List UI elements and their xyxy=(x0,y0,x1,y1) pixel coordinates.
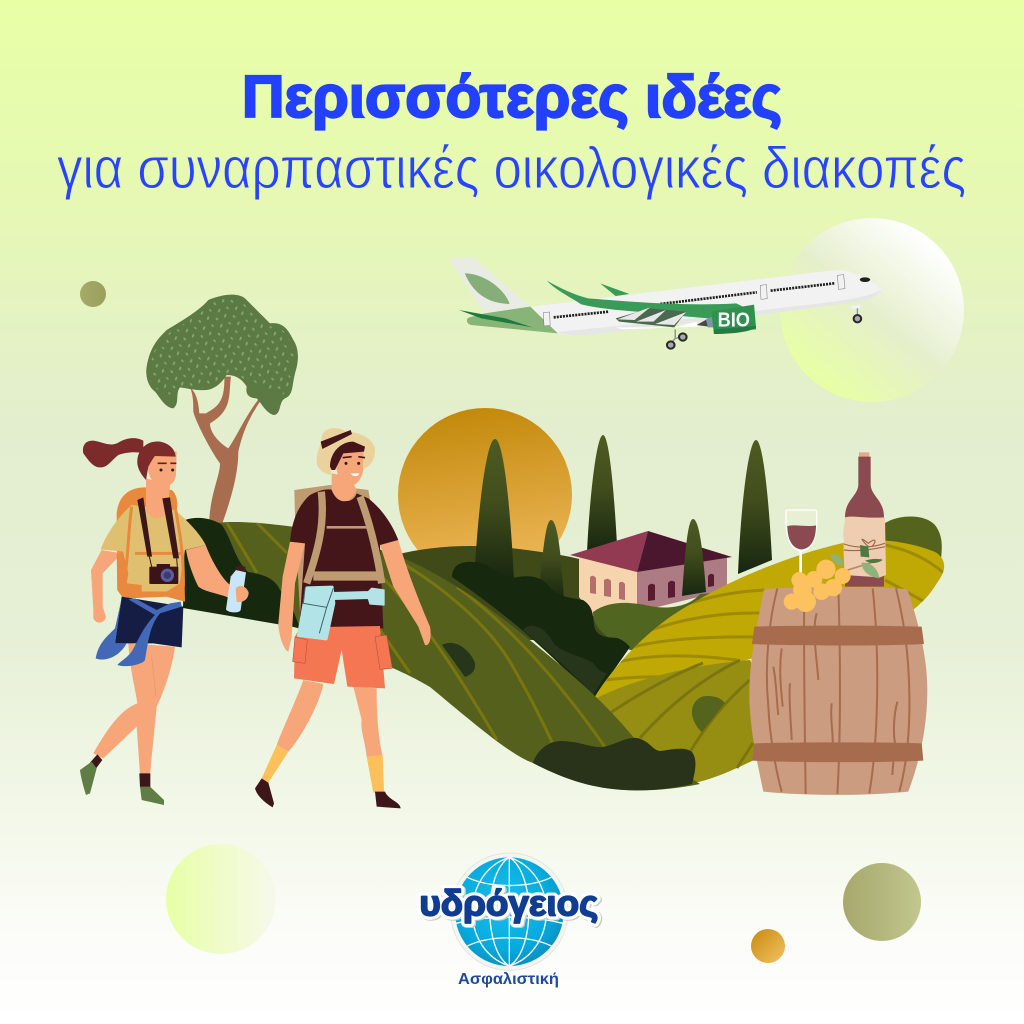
woman face xyxy=(147,452,177,486)
house front wall xyxy=(579,556,637,616)
back hill xyxy=(395,546,640,640)
yellow field rows xyxy=(590,545,945,682)
logo wordmark: υδρόγειος xyxy=(421,884,600,925)
man face xyxy=(335,452,365,486)
cypress 1 xyxy=(475,439,514,580)
man smile xyxy=(351,473,359,476)
cypress 3 xyxy=(587,435,617,552)
decorative circle: top left xyxy=(80,281,106,307)
wine still life xyxy=(749,452,927,795)
decorative circle: bottom left xyxy=(166,844,276,954)
logo globe xyxy=(451,853,568,970)
sun xyxy=(398,408,572,582)
farmhouse xyxy=(570,531,732,616)
man hat xyxy=(317,428,375,475)
plane tail leaf xyxy=(465,273,510,304)
decorative circle: bottom right xyxy=(843,863,921,941)
woman camera straps xyxy=(137,497,179,558)
plane doors xyxy=(543,275,845,326)
woman ponytail xyxy=(83,438,143,467)
woman shoes xyxy=(80,762,164,805)
plane tail band xyxy=(467,307,558,333)
hill rows xyxy=(227,523,605,747)
water bottle xyxy=(226,566,246,612)
airplane xyxy=(449,257,883,349)
plane engine label: BIO xyxy=(718,310,750,332)
decorative circle: pale moon xyxy=(780,218,964,402)
plane belly xyxy=(557,289,882,335)
barrel body xyxy=(749,587,927,795)
plane flaps base xyxy=(616,308,686,327)
cypress 4 xyxy=(682,519,706,596)
plane stabilizer xyxy=(459,310,532,327)
tree trunk xyxy=(190,377,260,525)
plane tail fin xyxy=(449,257,530,313)
branch and leaves xyxy=(827,545,883,578)
bush under house xyxy=(593,590,760,660)
logo wordmark: υδρόγειος xyxy=(419,882,598,923)
plane fuselage xyxy=(531,270,883,335)
plane main gear xyxy=(667,329,687,349)
dark bushes xyxy=(452,562,630,700)
plane flaps stripes xyxy=(617,307,686,325)
plane nose gear xyxy=(851,305,861,322)
logo wordmark: υδρόγειος xyxy=(419,882,598,923)
yellow field xyxy=(593,540,944,700)
decorative circle: small amber xyxy=(751,929,785,963)
woman leg line xyxy=(152,657,156,697)
man arms xyxy=(278,540,431,652)
cypress trees xyxy=(475,435,772,600)
bottle label xyxy=(843,517,886,577)
man hair xyxy=(330,442,365,470)
yellow vineyard field xyxy=(590,516,945,700)
man neck xyxy=(332,473,357,501)
woman hand xyxy=(236,586,249,602)
left dark bush xyxy=(183,518,300,628)
wine glass xyxy=(786,510,817,573)
tree leaves texture xyxy=(149,299,294,395)
man shoes xyxy=(255,778,401,808)
logo subtitle: Ασφαλιστική xyxy=(458,971,559,988)
man backpack xyxy=(294,485,383,613)
olive round bush xyxy=(692,696,725,732)
cypress 2 xyxy=(540,520,564,600)
front bush xyxy=(533,738,695,790)
man eyes xyxy=(343,457,365,458)
woman right arm xyxy=(186,545,248,602)
woman eyes xyxy=(158,461,176,466)
plane white fairing xyxy=(616,322,698,329)
plane far wing xyxy=(600,283,629,296)
woman pack straps xyxy=(117,553,185,602)
woman shirt xyxy=(101,505,206,592)
inner dark bush xyxy=(523,626,607,695)
wine bottle xyxy=(843,452,886,587)
man socks xyxy=(262,745,384,793)
woman hiker xyxy=(80,438,249,805)
house roof left xyxy=(570,531,648,572)
barrel bands xyxy=(752,626,924,762)
house windows front xyxy=(590,576,625,600)
olive hill rows xyxy=(610,660,753,768)
man legs xyxy=(277,680,383,757)
man hat band xyxy=(321,430,352,449)
woman neck xyxy=(146,478,170,519)
hill body xyxy=(200,522,700,790)
far right bush xyxy=(885,516,942,562)
tree canopy xyxy=(146,295,298,415)
bottle string xyxy=(844,539,885,551)
olive vineyard hill xyxy=(593,660,780,784)
man pack straps xyxy=(307,492,382,583)
plane engine nozzle xyxy=(697,318,714,327)
woman right leg xyxy=(93,643,175,774)
woman shorts xyxy=(115,597,183,647)
man hiker xyxy=(255,428,431,808)
tree xyxy=(146,295,298,525)
title: Περισσότερες ιδέες xyxy=(242,64,782,130)
plane wing xyxy=(547,281,750,318)
plane windows xyxy=(554,283,834,317)
man waist bag xyxy=(299,587,384,639)
man shorts xyxy=(294,626,385,688)
grapes xyxy=(784,560,851,612)
woman hair xyxy=(137,441,176,480)
cypress 5 xyxy=(738,440,772,574)
plane cockpit xyxy=(860,277,870,282)
barrel staves xyxy=(767,588,909,794)
house side wall xyxy=(637,556,727,612)
house windows side xyxy=(648,574,714,601)
logo xyxy=(419,853,600,988)
woman tied sweater xyxy=(96,598,182,666)
hill round bush xyxy=(442,643,475,677)
woman left arm xyxy=(91,550,122,623)
woman backpack xyxy=(117,487,185,602)
house roof right xyxy=(637,531,732,572)
woman socks xyxy=(90,754,150,787)
woman camera xyxy=(149,564,178,584)
man shorts pockets xyxy=(293,635,392,669)
striped green hill xyxy=(183,518,700,790)
man shirt xyxy=(290,489,398,628)
olive hill xyxy=(593,660,780,784)
plane engine xyxy=(711,305,756,333)
